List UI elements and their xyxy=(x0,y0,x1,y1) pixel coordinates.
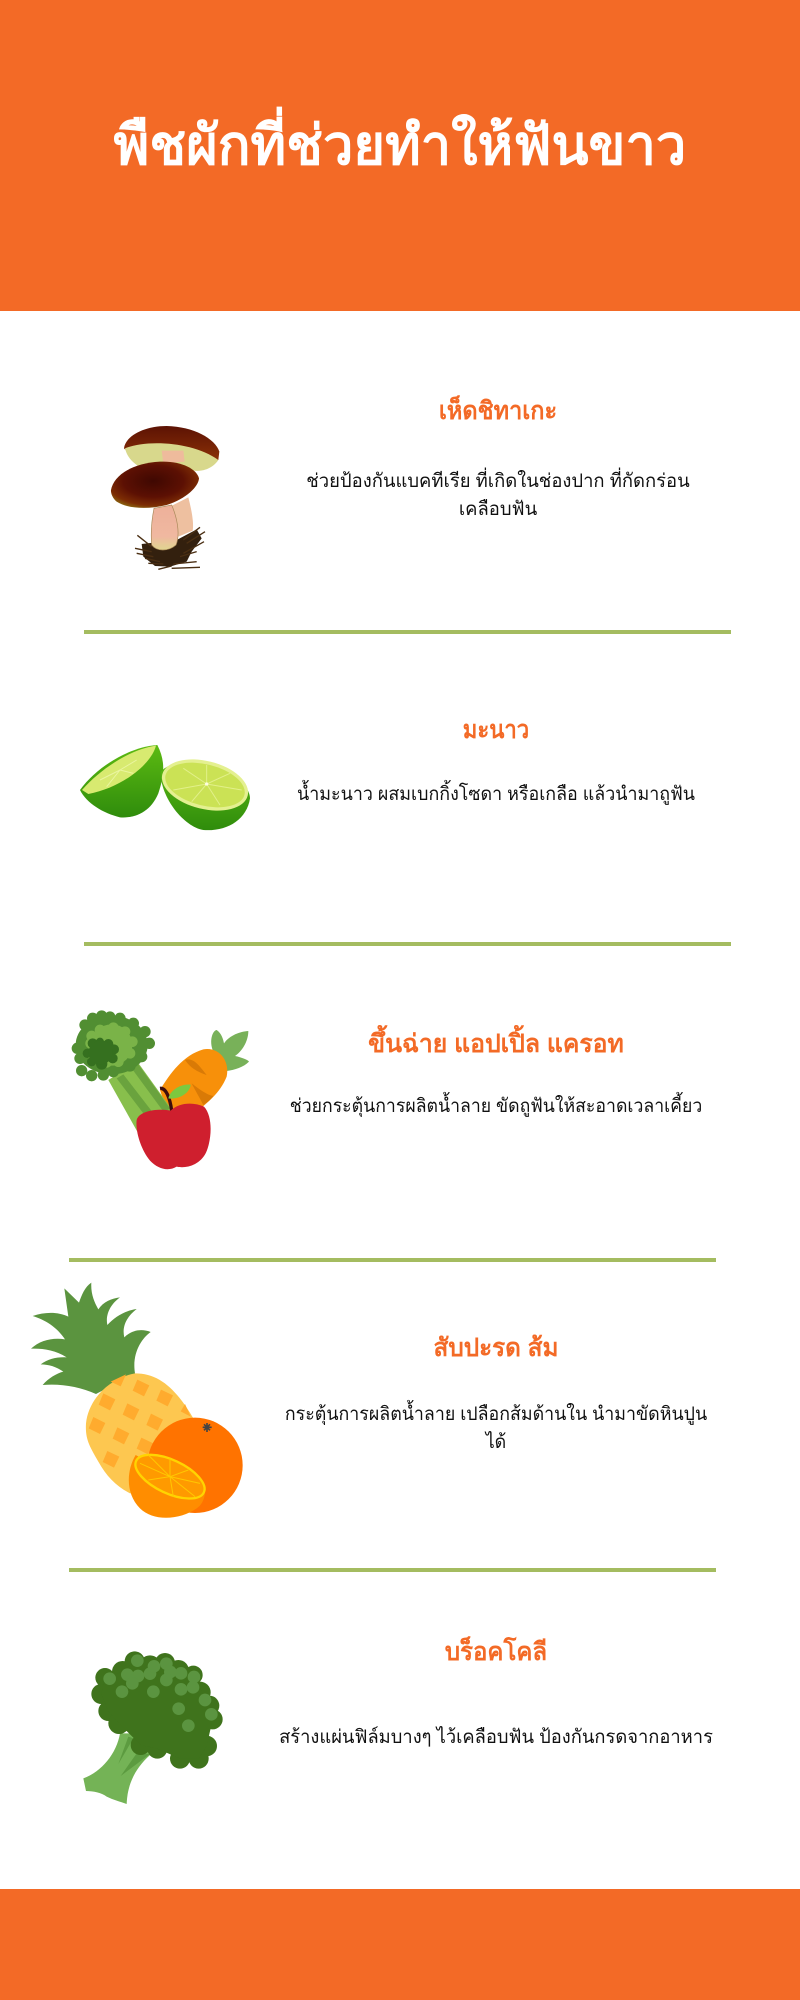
heading: pineapple orange: สับปะรด ส้ม xyxy=(434,1334,558,1362)
text: shiitake: เคลือบฟัน xyxy=(459,499,537,520)
left lime half xyxy=(80,745,163,817)
icon: shiitake mushrooms xyxy=(110,426,220,570)
carrot xyxy=(160,1030,249,1112)
header band xyxy=(0,0,800,311)
icon: broccoli xyxy=(83,1651,223,1804)
broccoli head xyxy=(91,1651,223,1769)
icon: pineapple and oranges xyxy=(31,1282,243,1518)
rear cap gills xyxy=(125,443,218,471)
pineapple body xyxy=(86,1373,193,1493)
footer band xyxy=(0,1889,800,2000)
text: pineapple orange xyxy=(285,1400,707,1453)
broccoli stem xyxy=(83,1733,150,1804)
heading: lime: มะนาว xyxy=(463,716,529,744)
soil and roots xyxy=(135,527,205,569)
celery leaves xyxy=(72,1010,155,1081)
text: broccoli: สร้างแผ่นฟิล์มบางๆ ไว้เคลือบฟัน ป้องกันกรดจากอาหาร xyxy=(279,1727,713,1748)
apple xyxy=(136,1084,211,1169)
broccoli florets xyxy=(103,1654,218,1732)
rear stem neck xyxy=(162,451,185,463)
heading: broccoli: บร็อคโคลี xyxy=(445,1638,547,1666)
text: pineapple orange: กระตุ้นการผลิตน้ำลาย เปลือกส้มด้านใน นำมาขัดหินปูน xyxy=(285,1404,707,1425)
right lime half xyxy=(157,751,253,830)
front stem xyxy=(151,505,178,550)
text: shiitake xyxy=(306,468,690,520)
icon: celery, carrot and apple xyxy=(72,1010,249,1170)
icon: limes xyxy=(80,745,250,830)
whole orange xyxy=(147,1418,243,1513)
text: pineapple orange: ได้ xyxy=(486,1432,506,1453)
cut orange xyxy=(129,1446,211,1518)
text: lime: น้ำมะนาว ผสมเบกกิ้งโซดา หรือเกลือ แล้วนำมาถูฟัน xyxy=(297,784,695,805)
pineapple leaves xyxy=(31,1283,151,1394)
celery stalk xyxy=(108,1062,173,1132)
front cap xyxy=(111,462,199,508)
orange navel xyxy=(203,1423,212,1432)
rear cap xyxy=(124,426,219,460)
text: shiitake: ช่วยป้องกันแบคทีเรีย ที่เกิดในช่องปาก ที่กัดกร่อน xyxy=(306,471,690,492)
heading: shiitake: เห็ดชิทาเกะ xyxy=(439,397,557,425)
heading: celery apple carrot: ขึ้นฉ่าย แอปเปิ้ล แครอท xyxy=(368,1030,624,1058)
title: พืชผักที่ช่วยทำให้ฟันขาว xyxy=(114,114,686,176)
rear stem xyxy=(170,497,193,537)
text: celery apple carrot: ช่วยกระตุ้นการผลิตน้ำลาย ขัดถูฟันให้สะอาดเวลาเคี้ยว xyxy=(290,1096,702,1117)
